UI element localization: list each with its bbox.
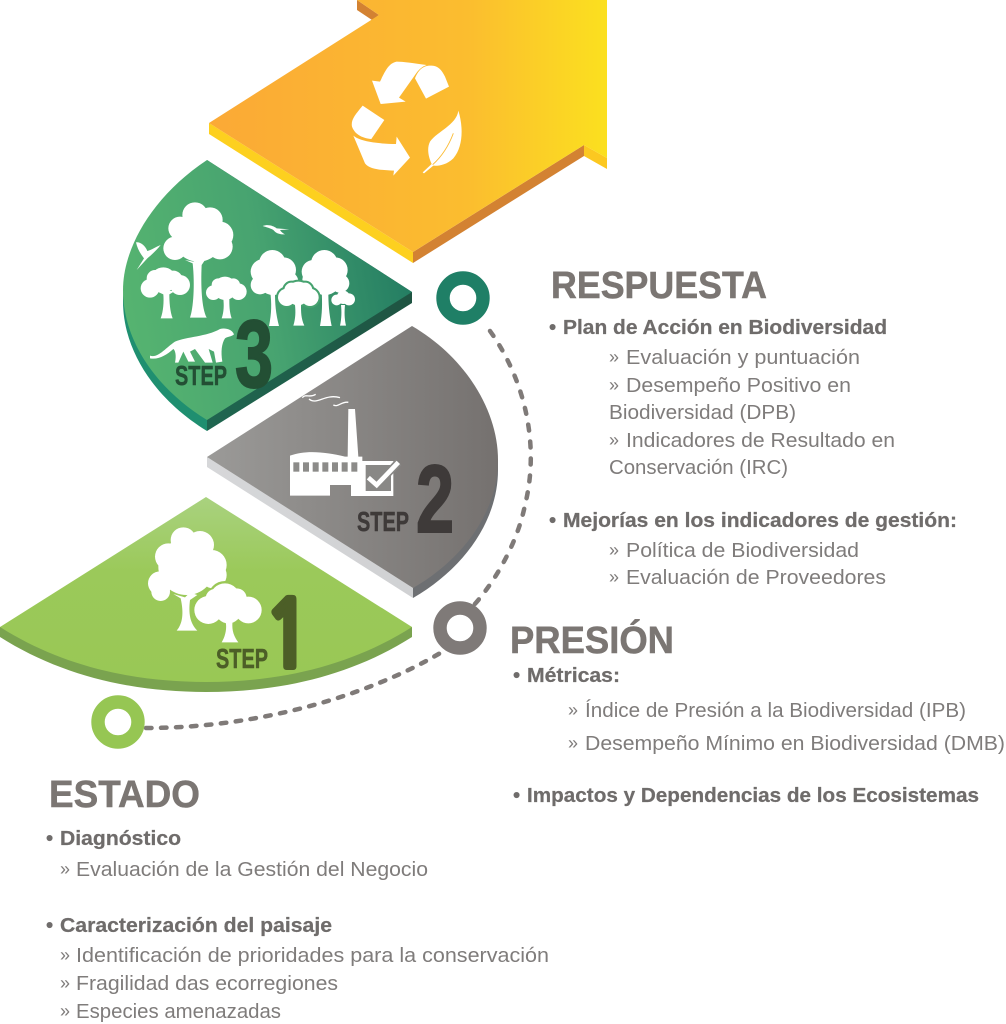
text block: respuesta: »	[609, 375, 619, 395]
marker: presión ring	[440, 608, 480, 648]
text block: presión: »	[568, 700, 578, 720]
text block: estado: Especies amenazadas	[76, 1000, 281, 1023]
text block: respuesta: »	[609, 347, 619, 367]
text block: estado: »	[60, 945, 70, 965]
marker: estado ring	[98, 702, 138, 742]
icon: flying bird	[263, 225, 289, 234]
text block: estado: Caracterización del paisaje	[60, 914, 332, 937]
label: step 3	[175, 301, 273, 408]
text block: respuesta: Biodiversidad (DPB)	[609, 401, 796, 424]
icon: two trees	[148, 527, 262, 642]
text block: estado: »	[60, 859, 70, 879]
text block: respuesta: Indicadores de Resultado en	[626, 429, 895, 452]
dashed path: presión to respuesta	[474, 331, 531, 605]
text block: presión: Desempeño Mínimo en Biodiversidad (DMB)	[585, 732, 1005, 755]
text block: respuesta: Mejorías en los indicadores de gestión:	[563, 509, 957, 532]
label: step 2: 2	[416, 446, 454, 553]
text block: presión: •	[513, 784, 520, 807]
icon: factory with checkmark	[290, 394, 398, 496]
text block: respuesta: •	[549, 316, 556, 339]
icon: hummingbird	[136, 242, 161, 270]
text block: respuesta: Evaluación y puntuación	[626, 346, 860, 369]
text block: estado: »	[60, 973, 70, 993]
marker: respuesta ring	[443, 278, 483, 318]
arrow: respuesta	[209, 0, 607, 263]
label: step 2	[357, 446, 454, 553]
dashed path: estado to presión	[146, 652, 442, 728]
text block: presión: Impactos y Dependencias de los Ecosistemas	[527, 784, 979, 807]
text block: estado: »	[60, 1001, 70, 1021]
icon: trees, hummingbird and jaguar	[136, 202, 247, 363]
text block: estado: Identificación de prioridades para la conservación	[76, 944, 549, 967]
text block: respuesta: »	[609, 430, 619, 450]
text block: presión: »	[568, 733, 578, 753]
panel: step 2 sector	[207, 326, 498, 598]
label: step 2: STEP	[357, 506, 409, 537]
text block: respuesta	[549, 265, 957, 589]
text block: estado: Evaluación de la Gestión del Negocio	[76, 858, 428, 881]
text block: respuesta: »	[609, 567, 619, 587]
label: step 1: 1	[263, 590, 313, 681]
icon: jaguar	[150, 329, 234, 363]
icon: right group of trees	[251, 250, 355, 326]
text block: respuesta: •	[549, 509, 556, 532]
text block: respuesta: Desempeño Positivo en	[626, 374, 851, 397]
text block: presión: Índice de Presión a la Biodiversidad (IPB)	[585, 699, 966, 722]
panel: step 3 sector	[123, 160, 412, 431]
text block: estado: •	[46, 827, 53, 850]
heading: estado: ESTADO	[49, 774, 200, 816]
text block: respuesta: »	[609, 540, 619, 560]
text block: estado: Diagnóstico	[60, 827, 181, 850]
text block: estado	[46, 774, 549, 1023]
text block: respuesta: Conservación (IRC)	[609, 456, 788, 479]
text block: respuesta: Política de Biodiversidad	[626, 539, 859, 562]
label: step 3: STEP	[175, 360, 227, 391]
text block: respuesta: Plan de Acción en Biodiversidad	[563, 316, 887, 339]
heading: presión: PRESIÓN	[510, 618, 674, 662]
text block: estado: •	[46, 914, 53, 937]
label: step 3: 3	[235, 301, 273, 408]
heading: respuesta: RESPUESTA	[551, 265, 767, 307]
icon: recycling with leaf	[352, 62, 462, 176]
text block: presión	[510, 618, 1005, 807]
label: step 1	[216, 590, 313, 681]
label: step 1: STEP	[216, 643, 268, 674]
text block: respuesta: Evaluación de Proveedores	[626, 566, 886, 589]
panel: step 1 sector	[0, 497, 412, 692]
text block: presión: Métricas:	[527, 664, 620, 687]
text block: estado: Fragilidad das ecorregiones	[76, 972, 338, 995]
text block: presión: •	[513, 664, 520, 687]
